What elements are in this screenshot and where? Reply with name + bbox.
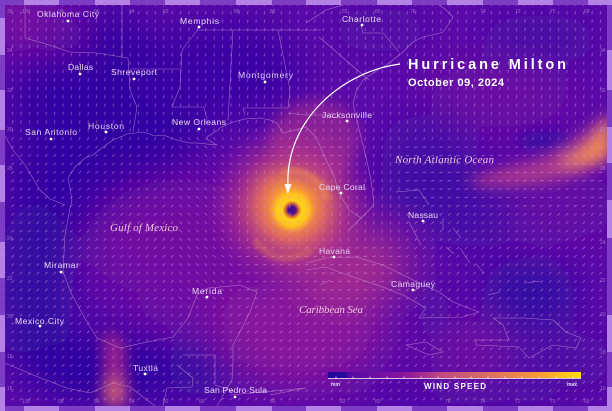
graticule labels: 32	[7, 88, 13, 94]
ocean labels: Gulf of Mexico	[110, 222, 178, 234]
graticule labels: 34	[600, 48, 606, 54]
city labels: Havana	[319, 246, 350, 256]
city labels: New Orleans	[172, 117, 226, 127]
city labels: Charlotte	[342, 14, 381, 24]
city labels: Nassau	[408, 210, 438, 220]
graticule labels: 96	[94, 399, 100, 405]
graticule labels: 92	[163, 9, 169, 15]
ocean labels: Caribbean Sea	[299, 304, 364, 316]
city labels: Tuxtla	[133, 363, 158, 373]
graticule labels: 76	[445, 399, 451, 405]
graticule labels: 30	[7, 127, 13, 133]
arrow: title to hurricane eye	[284, 64, 400, 194]
graticule labels: 82	[340, 399, 346, 405]
city labels: Miramar	[44, 260, 79, 270]
graticule labels: 82	[342, 9, 348, 15]
graticule labels: 70	[550, 9, 556, 15]
graticule labels: 72	[515, 9, 521, 15]
city labels	[15, 9, 438, 398]
graticule labels: 28	[7, 166, 13, 172]
city labels: Montgomery	[238, 70, 294, 80]
graticule labels: 98	[58, 9, 64, 15]
title	[408, 57, 566, 89]
graticule labels: 22	[600, 278, 606, 284]
graticule labels: 68	[584, 399, 590, 405]
graticule labels: 74	[480, 399, 486, 405]
city labels: Shreveport	[111, 67, 158, 77]
title: Hurricane Milton	[408, 57, 566, 73]
hurricane eye	[270, 190, 314, 232]
graticule labels: 18	[7, 354, 13, 360]
city labels: Camaguey	[391, 279, 436, 289]
graticule labels: 28	[600, 166, 606, 172]
graticule labels: 80	[375, 399, 381, 405]
city labels: Oklahoma City	[37, 9, 100, 19]
legend: wind speed: min	[331, 382, 340, 388]
graticule labels: 36	[7, 9, 13, 15]
legend: wind speed	[328, 372, 581, 391]
legend: wind speed: max	[567, 382, 577, 388]
graticule labels: 94	[129, 9, 135, 15]
city labels: Jacksonville	[322, 110, 372, 120]
graticule labels: 24	[7, 236, 13, 242]
graticule labels: 34	[7, 48, 13, 54]
city labels: San Antonio	[25, 127, 77, 137]
city labels: Merida	[192, 286, 222, 296]
graticule labels: 22	[7, 276, 13, 282]
city labels: Houston	[88, 121, 124, 131]
graticule labels: 18	[600, 350, 606, 356]
graticule labels: 70	[550, 399, 556, 405]
city labels: Memphis	[180, 16, 219, 26]
graticule labels: 72	[515, 399, 521, 405]
graticule labels: 16	[600, 386, 606, 392]
graticule labels: 78	[410, 9, 416, 15]
graticule labels: 68	[584, 9, 590, 15]
graticule labels: 20	[600, 312, 606, 318]
graticule labels: 16	[7, 386, 13, 392]
graticule labels: 30	[600, 127, 606, 133]
graticule labels: 88	[234, 9, 240, 15]
city labels: Dallas	[68, 62, 93, 72]
city labels: San Pedro Sula	[204, 385, 267, 395]
graticule labels: 100	[22, 399, 31, 405]
graticule labels: 80	[375, 9, 381, 15]
graticule labels: 100	[22, 9, 31, 15]
city labels: Mexico City	[15, 316, 65, 326]
title: October 09, 2024	[408, 77, 505, 89]
graticule labels: 20	[7, 314, 13, 320]
graticule labels: 24	[600, 240, 606, 246]
legend: wind speed: WIND SPEED	[424, 382, 486, 391]
hurricane glow	[214, 94, 372, 280]
graticule labels: 74	[480, 9, 486, 15]
ocean labels	[110, 154, 494, 316]
graticule labels: 92	[163, 399, 169, 405]
ocean labels: North Atlantic Ocean	[394, 154, 494, 166]
graticule labels: 94	[129, 399, 135, 405]
graticule labels: 96	[94, 9, 100, 15]
city labels: Cape Coral	[319, 182, 365, 192]
graticule labels: 86	[270, 9, 276, 15]
graticule labels: 90	[199, 399, 205, 405]
graticule labels: 86	[270, 399, 276, 405]
graticule labels: 32	[600, 88, 606, 94]
graticule labels: 98	[58, 399, 64, 405]
